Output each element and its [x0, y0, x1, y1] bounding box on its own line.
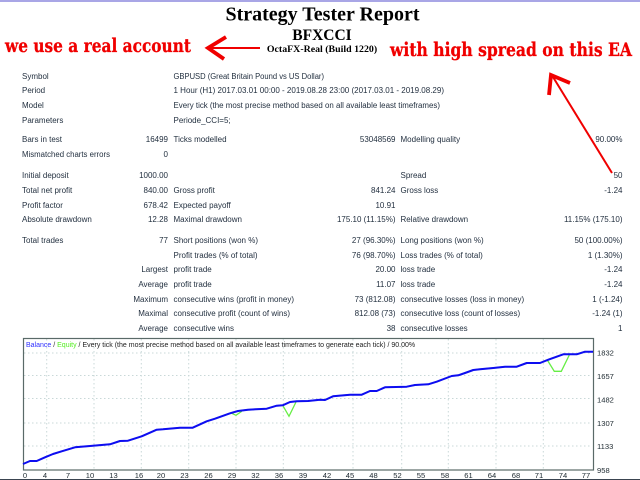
chart frame: [24, 338, 594, 470]
row labels: Model: [22, 101, 44, 110]
first value column: Maximal: [138, 309, 168, 318]
third value column: -1.24: [604, 186, 623, 195]
x axis labels: 0: [23, 471, 27, 480]
third value column: 90.00%: [595, 135, 622, 144]
x axis labels: 48: [369, 471, 378, 480]
x axis labels: 23: [180, 471, 189, 480]
right labels: [400, 135, 524, 333]
x axis labels: 45: [346, 471, 354, 480]
middle labels and settings: profit trade: [174, 265, 212, 274]
second value column: 38: [387, 324, 396, 333]
x axis labels: 36: [275, 471, 283, 480]
middle labels and settings: Periode_CCI=5;: [174, 116, 231, 125]
y axis labels: 1133: [597, 442, 613, 451]
row labels: Total trades: [22, 236, 63, 245]
row labels: Bars in test: [22, 135, 63, 144]
second value column: 27 (96.30%): [352, 236, 396, 245]
row labels: Total net profit: [22, 186, 73, 195]
row labels: [22, 72, 110, 245]
x axis labels: 42: [323, 471, 331, 480]
second value column: 841.24: [371, 186, 396, 195]
report table: [22, 72, 623, 333]
x axis labels: 64: [488, 471, 496, 480]
third value column: -1.24: [604, 280, 623, 289]
row labels: Initial deposit: [22, 171, 69, 180]
first value column: 840.00: [144, 186, 169, 195]
first value column: 0: [164, 150, 169, 159]
x axis labels: 68: [512, 471, 520, 480]
y axis labels: 1657: [597, 372, 614, 381]
first value column: 16499: [146, 135, 169, 144]
row labels: Absolute drawdown: [22, 215, 92, 224]
balance and equity chart: [23, 338, 614, 480]
second value column: 11.07: [376, 280, 396, 289]
y axis labels: 1832: [597, 348, 614, 358]
row labels: Symbol: [22, 72, 49, 81]
second value column: 73 (812.08): [355, 295, 396, 304]
right labels: Relative drawdown: [400, 215, 468, 224]
y axis labels: 1307: [597, 419, 614, 428]
x axis labels: 7: [66, 471, 70, 480]
x axis labels: [23, 471, 590, 480]
middle labels and settings: Expected payoff: [174, 201, 232, 210]
row labels: Mismatched charts errors: [22, 150, 110, 159]
third value column: [564, 135, 623, 333]
right labels: loss trade: [400, 265, 436, 274]
third value column: -1.24: [604, 265, 623, 274]
arrow: to account name: [208, 37, 260, 59]
first value column: 12.28: [148, 215, 169, 224]
y axis labels: 958: [597, 466, 610, 475]
first value column: Average: [138, 280, 169, 289]
x axis labels: 10: [86, 471, 94, 480]
right labels: loss trade: [400, 280, 436, 289]
row labels: Parameters: [22, 116, 63, 125]
right labels: consecutive losses (loss in money): [400, 295, 524, 304]
third value column: 1 (-1.24): [592, 295, 623, 304]
x axis labels: 26: [204, 471, 213, 480]
middle labels and settings: profit trade: [174, 280, 212, 289]
third value column: -1.24 (1): [592, 309, 623, 318]
middle labels and settings: Profit trades (% of total): [174, 251, 258, 260]
first value column: [133, 135, 169, 333]
x axis labels: 29: [228, 471, 236, 480]
middle labels and settings: Gross profit: [174, 186, 216, 195]
x axis labels: 52: [393, 471, 402, 480]
first value column: 77: [159, 236, 169, 245]
middle labels and settings: consecutive wins (profit in money): [174, 295, 294, 304]
right labels: consecutive loss (count of losses): [400, 309, 520, 318]
third value column: 50: [614, 171, 623, 180]
chart legend: Balance: [26, 342, 51, 349]
middle labels and settings: Ticks modelled: [174, 135, 227, 144]
second value column: [337, 135, 396, 333]
right labels: Spread: [400, 171, 426, 180]
balance line: [23, 352, 593, 464]
right labels: Long positions (won %): [400, 236, 484, 245]
right labels: Loss trades (% of total): [400, 251, 483, 260]
middle labels and settings: Short positions (won %): [174, 236, 258, 245]
second value column: 175.10 (11.15%): [337, 215, 396, 224]
first value column: 678.42: [144, 201, 169, 210]
middle labels and settings: consecutive wins: [174, 324, 234, 333]
first value column: Maximum: [133, 295, 168, 304]
middle labels and settings: [174, 72, 444, 333]
right labels: Gross loss: [400, 186, 438, 195]
first value column: Largest: [141, 265, 169, 274]
x axis labels: 20: [157, 471, 165, 480]
x axis labels: 32: [251, 471, 260, 480]
first value column: Average: [138, 324, 169, 333]
row labels: Profit factor: [22, 201, 63, 210]
first value column: 1000.00: [139, 171, 169, 180]
title: Strategy Tester Report: [225, 4, 420, 26]
second value column: 76 (98.70%): [352, 251, 396, 260]
second value column: 10.91: [375, 201, 396, 210]
subtitle: EA name: BFXCCI: [292, 27, 352, 44]
chart legend: / Equity / Every tick (the most precise method based on all available least timeframes to generate each tick) / 90.00%: [53, 342, 415, 349]
y axis labels: 1482: [597, 396, 614, 404]
subtitle: account and build: OctaFX-Real (Build 1220): [267, 44, 377, 55]
row labels: Period: [22, 86, 45, 95]
middle labels and settings: Every tick (the most precise method based on all available least timeframes): [174, 101, 440, 110]
third value column: 50 (100.00%): [574, 236, 623, 245]
x axis labels: 61: [464, 471, 473, 480]
middle labels and settings: consecutive profit (count of wins): [174, 309, 290, 318]
y axis labels: [597, 348, 614, 475]
x axis labels: 16: [135, 471, 143, 480]
arrow: from spread value to callout: [549, 75, 612, 173]
middle labels and settings: 1 Hour (H1) 2017.03.01 00:00 - 2019.08.28 23:00 (2017.03.01 - 2019.08.29): [174, 86, 444, 95]
x axis labels: 55: [417, 471, 425, 480]
x axis labels: 13: [109, 471, 118, 480]
third value column: 1: [618, 324, 623, 333]
x axis labels: 71: [535, 471, 543, 480]
equity line: [232, 355, 569, 416]
x axis labels: 39: [299, 471, 307, 480]
middle labels and settings: GBPUSD (Great Britain Pound vs US Dollar): [174, 72, 324, 81]
second value column: 53048569: [360, 135, 396, 144]
third value column: 11.15% (175.10): [564, 215, 623, 224]
x axis labels: 77: [582, 471, 590, 480]
x axis labels: 74: [559, 471, 567, 480]
right labels: Modelling quality: [400, 135, 460, 144]
second value column: 812.08 (73): [355, 309, 396, 318]
middle labels and settings: Maximal drawdown: [174, 215, 242, 224]
right labels: consecutive losses: [400, 324, 468, 333]
third value column: 1 (1.30%): [588, 251, 623, 260]
second value column: 20.00: [375, 265, 396, 274]
x axis labels: 58: [441, 471, 449, 480]
x axis labels: 4: [43, 471, 47, 480]
callout: real account: we use a real account: [4, 35, 191, 57]
